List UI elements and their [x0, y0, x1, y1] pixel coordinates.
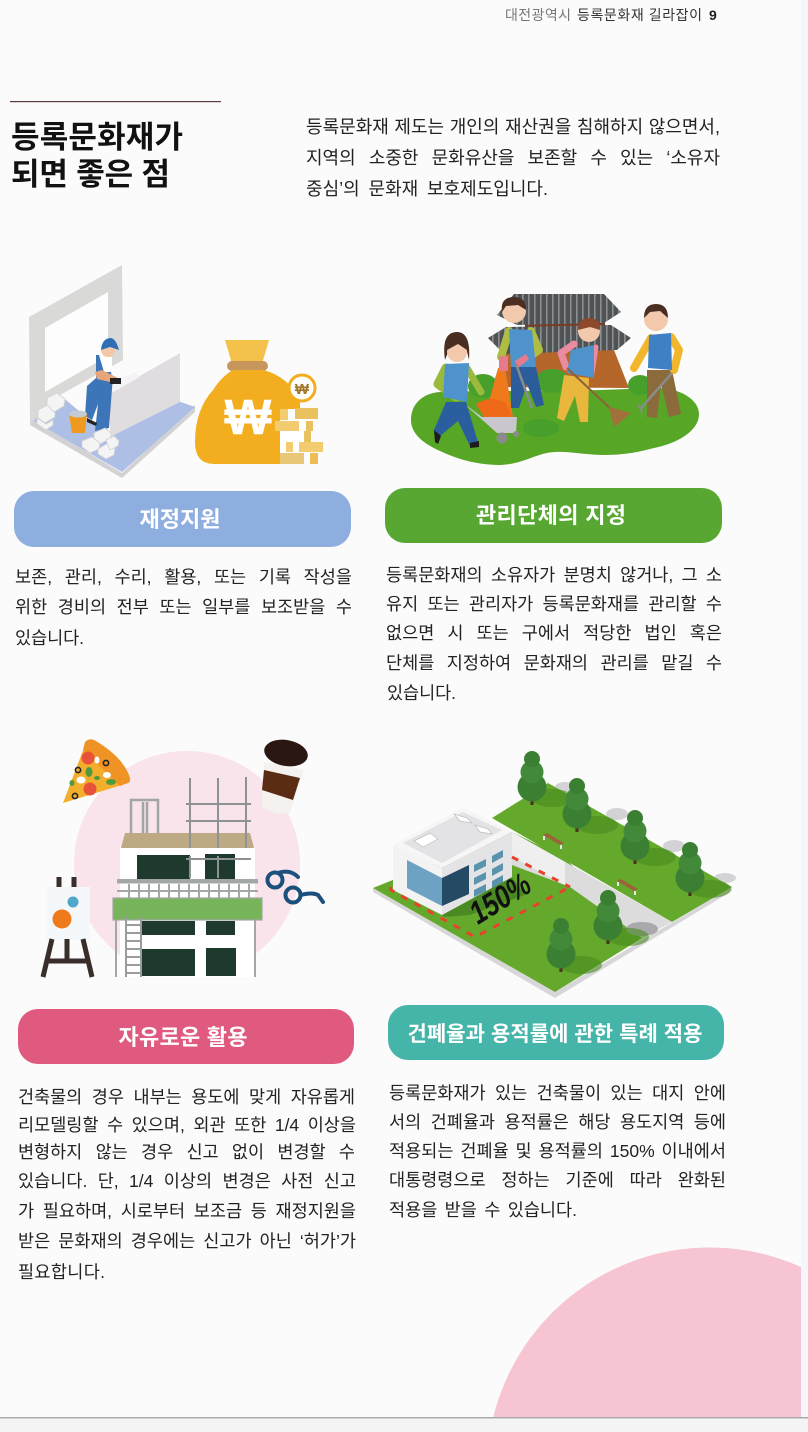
money bag: ₩ — [295, 381, 310, 398]
illustration: financial support, builder and money bag — [29, 265, 323, 478]
pill heading: 재정지원 — [14, 491, 351, 547]
pink circle — [74, 751, 300, 977]
title: 되면 좋은 점 — [11, 157, 170, 192]
body text: special case: 등록문화재가 있는 건축물이 있는 대지 안에 — [389, 1083, 726, 1103]
pill heading: 재정지원: 재정지원 — [140, 507, 220, 532]
pill heading: 건폐율과 용적률에 관한 특례 적용 — [388, 1005, 724, 1060]
running header: 대전광역시 — [505, 7, 571, 23]
body text: special case: 대통령령으로 정하는 기준에 따라 완화된 — [389, 1170, 726, 1190]
bucket — [69, 410, 87, 433]
body text: free use — [18, 1087, 356, 1282]
body text: financial support — [15, 567, 352, 648]
body text: management group: 등록문화재의 소유자가 분명치 않거나, 그 소 — [386, 565, 722, 585]
coin bricks — [275, 408, 323, 464]
body text: financial support: 보존, 관리, 수리, 활용, 또는 기록 작성을 — [15, 567, 352, 587]
scaffold rear — [186, 777, 251, 878]
label 150%: 150% — [463, 867, 538, 932]
body text: free use: 리모델링할 수 있으며, 외관 또한 1/4 이상을 — [18, 1115, 356, 1135]
pill heading: 건폐율과 용적률에 관한 특례 적용: 건폐율과 용적률에 관한 특례 적용 — [408, 1023, 702, 1046]
low wall — [110, 353, 180, 437]
body text: special case: 적용되는 건폐율 및 용적률의 150% 이내에서 — [389, 1141, 726, 1161]
road — [512, 832, 672, 938]
lawn shadow — [442, 877, 525, 917]
pizza — [63, 739, 130, 803]
person with grabber — [634, 304, 681, 418]
base edge — [373, 887, 732, 998]
body text: free use: 있습니다. 단, 1/4 이상의 변경은 사전 신고 — [18, 1171, 356, 1191]
title — [10, 101, 221, 192]
coffee cup — [262, 736, 310, 814]
worker — [85, 338, 121, 431]
running header — [505, 7, 717, 23]
body text: management group: 없으면 시 또는 구에서 적당한 법인 혹은 — [386, 623, 722, 643]
body text: free use: 필요합니다. — [18, 1262, 105, 1282]
building — [113, 800, 262, 977]
body text: free use: 건축물의 경우 내부는 용도에 맞게 자유롭게 — [18, 1087, 355, 1107]
bushes — [468, 369, 652, 437]
illustration: building-coverage special case, isometric lot — [373, 751, 736, 998]
body text: free use: 가 필요하며, 시로부터 보조금 등 재정지원을 — [18, 1201, 356, 1221]
floor — [30, 405, 195, 478]
ladder — [126, 916, 141, 977]
benches — [543, 833, 564, 849]
pill heading: 관리단체의 지정: 관리단체의 지정 — [476, 503, 626, 528]
title: 등록문화재가 — [11, 120, 183, 155]
body text: management group — [386, 565, 722, 703]
bricks — [37, 393, 119, 459]
body text: financial support: 위한 경비의 전부 또는 일부를 보조받을 수 — [15, 597, 352, 617]
easel — [43, 877, 92, 977]
person with broom — [557, 318, 631, 427]
intro text: 중심’의 문화재 보호제도입니다. — [306, 179, 548, 199]
illustration: free use, building under renovation — [43, 736, 323, 977]
body text: management group: 있습니다. — [387, 683, 456, 703]
trees — [518, 751, 573, 807]
illustration: management group, people cleaning a heritage site — [411, 294, 699, 465]
intro text: 지역의 소중한 문화유산을 보존할 수 있는 ‘소유자 — [306, 148, 720, 168]
body text: special case — [389, 1083, 726, 1220]
ground — [411, 387, 699, 465]
pill heading: 관리단체의 지정 — [385, 488, 722, 543]
body text: free use: 변형하지 않는 경우 신고 없이 변경할 수 — [18, 1142, 355, 1162]
intro text: 등록문화재 제도는 개인의 재산권을 침해하지 않으면서, — [306, 117, 720, 137]
body text: management group: 단체를 지정하여 문화재의 관리를 맡길 수 — [386, 653, 722, 673]
body text: financial support: 있습니다. — [15, 628, 84, 648]
body text: management group: 유지 또는 관리자가 등록문화재를 관리할 수 — [386, 594, 722, 614]
pill heading: 자유로운 활용 — [18, 1009, 354, 1064]
building — [393, 807, 512, 915]
intro text — [306, 117, 720, 199]
body text: special case: 서의 건폐율과 용적률은 해당 용도지역 등에 — [389, 1112, 726, 1132]
shadow blobs — [555, 782, 736, 883]
decorative pink circle, bottom right — [0, 1247, 808, 1418]
glasses — [268, 872, 323, 902]
wall frame — [29, 265, 123, 423]
running header: 9 — [709, 7, 717, 23]
red dashed boundary — [390, 857, 570, 937]
body text: special case: 적용을 받을 수 있습니다. — [389, 1200, 577, 1220]
running header: 등록문화재 길라잡이 — [577, 7, 702, 23]
lawn — [373, 832, 642, 992]
body text: free use: 받은 문화재의 경우에는 신고가 아닌 ‘허가’가 — [18, 1231, 356, 1251]
money bag: ₩ — [224, 389, 272, 445]
person with wheelbarrow — [434, 332, 519, 448]
temple — [488, 294, 631, 388]
person with tongs — [499, 297, 544, 408]
pill heading: 자유로운 활용: 자유로운 활용 — [118, 1025, 248, 1050]
money bag — [195, 340, 315, 464]
